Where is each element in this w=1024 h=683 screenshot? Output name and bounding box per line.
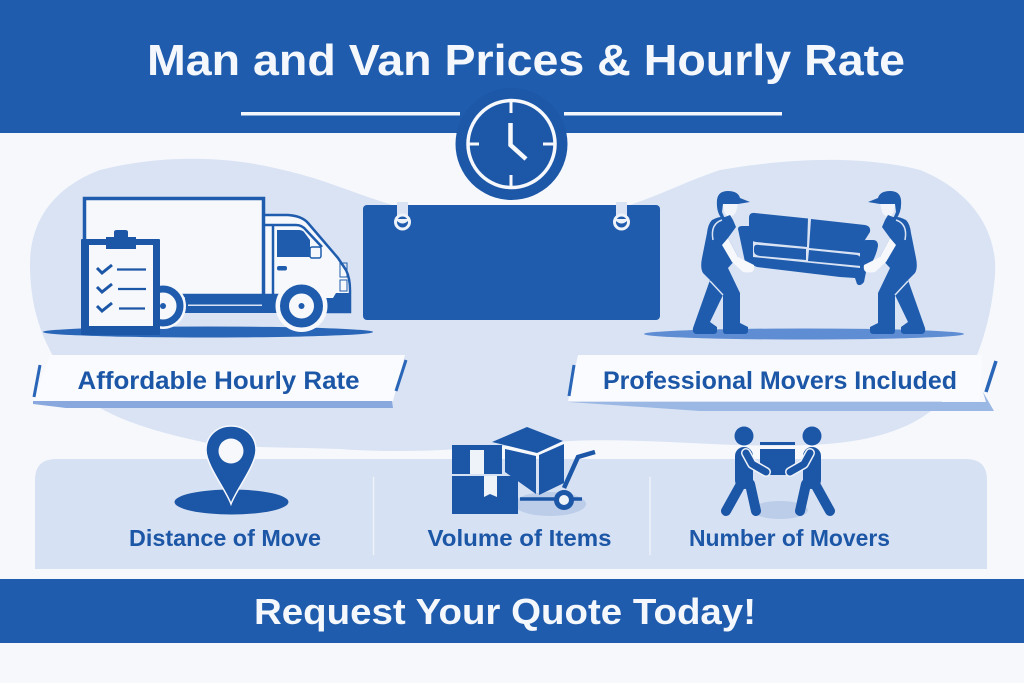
- sofa: [738, 213, 878, 285]
- icon: two movers with box: [726, 426, 830, 519]
- hanging sign: [363, 202, 660, 320]
- label: distance: Distance of Move: [129, 525, 321, 551]
- label: volume: Volume of Items: [428, 525, 612, 551]
- clipboard: [81, 230, 160, 335]
- truck chassis: [185, 295, 280, 313]
- truck cargo box: [84, 198, 264, 296]
- footer band: [0, 579, 1024, 643]
- truck cab: [264, 215, 350, 312]
- left ribbon banner: [33, 355, 406, 408]
- truck ground shadow: [43, 326, 373, 338]
- truck rear wheel: [140, 283, 186, 329]
- left ribbon label: Affordable Hourly Rate: [78, 367, 360, 395]
- header band: [0, 0, 1024, 133]
- right ribbon label: Professional Movers Included: [603, 367, 957, 395]
- movers illustration: [644, 191, 964, 340]
- mover left: [693, 191, 754, 334]
- truck front wheel: [276, 280, 328, 332]
- footer call to action: Request Your Quote Today!: [254, 591, 756, 632]
- icon: clock: [456, 88, 568, 200]
- title rule right: [564, 112, 782, 116]
- icon: location pin: [174, 426, 288, 514]
- panel dividers: [374, 477, 650, 555]
- title rule left: [241, 112, 460, 116]
- truck illustration: [43, 198, 373, 338]
- mover right: [864, 191, 925, 334]
- background blob: [30, 159, 995, 451]
- factors panel: [35, 426, 987, 569]
- right ribbon banner: [568, 355, 996, 411]
- movers ground shadow: [644, 328, 964, 340]
- icon: boxes on hand truck: [452, 427, 595, 516]
- label: movers: Number of Movers: [689, 525, 890, 551]
- title: Man and Van Prices & Hourly Rate: [147, 36, 905, 85]
